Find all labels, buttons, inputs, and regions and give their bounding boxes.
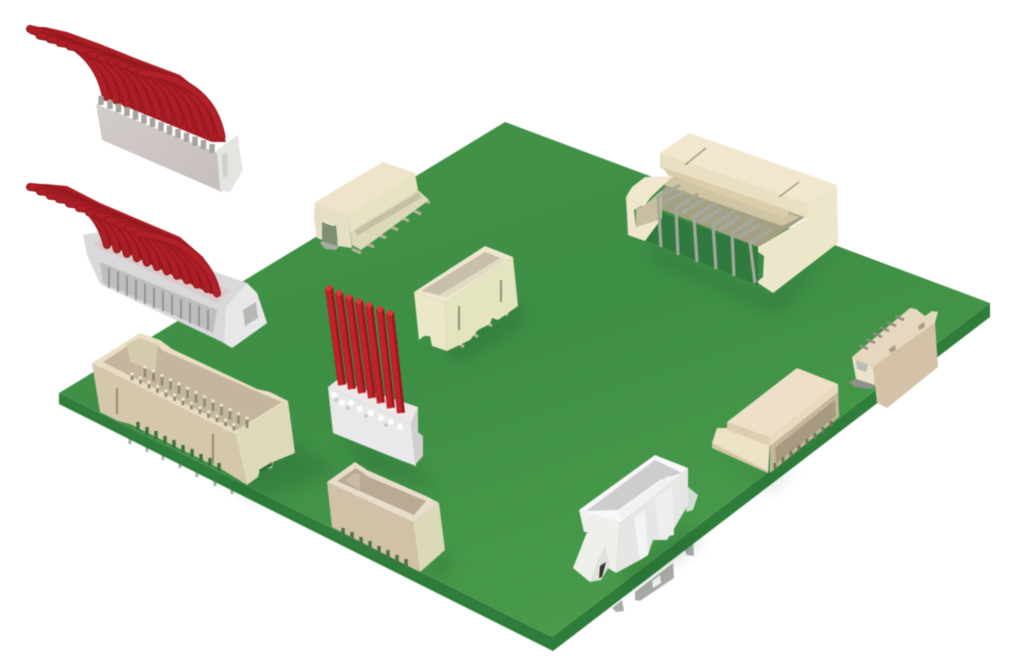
inner cavity (103, 338, 282, 430)
top rim (92, 333, 288, 434)
contacts (101, 96, 212, 153)
red wires (30, 29, 222, 137)
top face (727, 368, 838, 438)
front lip (100, 365, 237, 433)
left face (579, 510, 620, 573)
silver L-shaped pins (658, 185, 772, 283)
metal tab (320, 236, 342, 250)
plug top (328, 380, 418, 424)
left face (314, 202, 352, 248)
circuit board (59, 122, 990, 651)
inner cavity (337, 468, 426, 515)
connector: large double-row header bottom-left (92, 333, 295, 485)
pins (859, 316, 904, 349)
front face (852, 357, 875, 385)
top face (315, 162, 415, 215)
bottom teeth (343, 528, 406, 567)
right face (616, 468, 688, 573)
pin tips (132, 367, 247, 424)
wire tips (329, 288, 390, 313)
left face (414, 292, 447, 351)
socket window (100, 262, 217, 333)
front face (92, 363, 247, 485)
socket deck (93, 238, 230, 303)
plug bumps (334, 395, 400, 427)
left arm (626, 176, 673, 207)
top rim (579, 455, 688, 522)
plug front (328, 387, 416, 466)
board side edges (59, 303, 990, 651)
top face (852, 308, 938, 367)
red wires (30, 187, 217, 293)
cable connector: red ribbon with plain housing (top) (28, 27, 243, 192)
seven wires (328, 288, 401, 413)
left step (712, 428, 770, 473)
connector: vertical header centre (414, 246, 518, 351)
shaded board under opening (640, 205, 758, 285)
connector: far-right SMD housing (849, 308, 938, 408)
connector: beige header bottom-centre (327, 462, 445, 572)
top marks (889, 345, 896, 353)
connector: red wire harness with white plug (328, 288, 423, 466)
back wall (650, 177, 807, 247)
right face (413, 503, 445, 572)
socket body (83, 232, 267, 348)
connector: right-angle top-right housing with pins (626, 133, 838, 293)
slots (117, 388, 213, 464)
upper side face (348, 173, 418, 232)
inner cavity (421, 252, 506, 297)
under-board metal tabs (130, 326, 944, 612)
pin columns (132, 367, 247, 430)
body right face (873, 323, 938, 408)
front strip (660, 153, 807, 218)
lever (573, 532, 605, 582)
red ribbon mass (28, 27, 226, 142)
rear tab (686, 487, 698, 512)
housing front (96, 104, 222, 192)
cable connector: red ribbon mated in socket (second) (28, 184, 267, 348)
top rim (414, 246, 513, 303)
component shadows on board (230, 240, 840, 590)
top rim (327, 462, 439, 522)
front face (327, 482, 420, 572)
housing end (217, 135, 243, 192)
metal tab (849, 378, 878, 389)
right face (445, 257, 518, 351)
plug end (411, 407, 423, 466)
opening (770, 384, 839, 473)
solder feet (352, 199, 430, 253)
socket end block (224, 283, 267, 348)
top face (660, 133, 837, 203)
red ribbon mass (28, 184, 221, 294)
right block (758, 185, 838, 293)
connector: low-profile housing right-centre (712, 368, 839, 473)
right face (235, 401, 295, 485)
lower step (350, 190, 429, 250)
feet (458, 311, 508, 347)
window slats (109, 268, 208, 330)
inner cavity (586, 460, 682, 511)
bottom teeth (138, 422, 219, 471)
top slots (685, 148, 799, 197)
connector: small SMD housing top-centre (314, 162, 430, 253)
board top surface (59, 122, 990, 637)
connector: white latched housing bottom (573, 455, 698, 582)
side slots (459, 280, 501, 330)
